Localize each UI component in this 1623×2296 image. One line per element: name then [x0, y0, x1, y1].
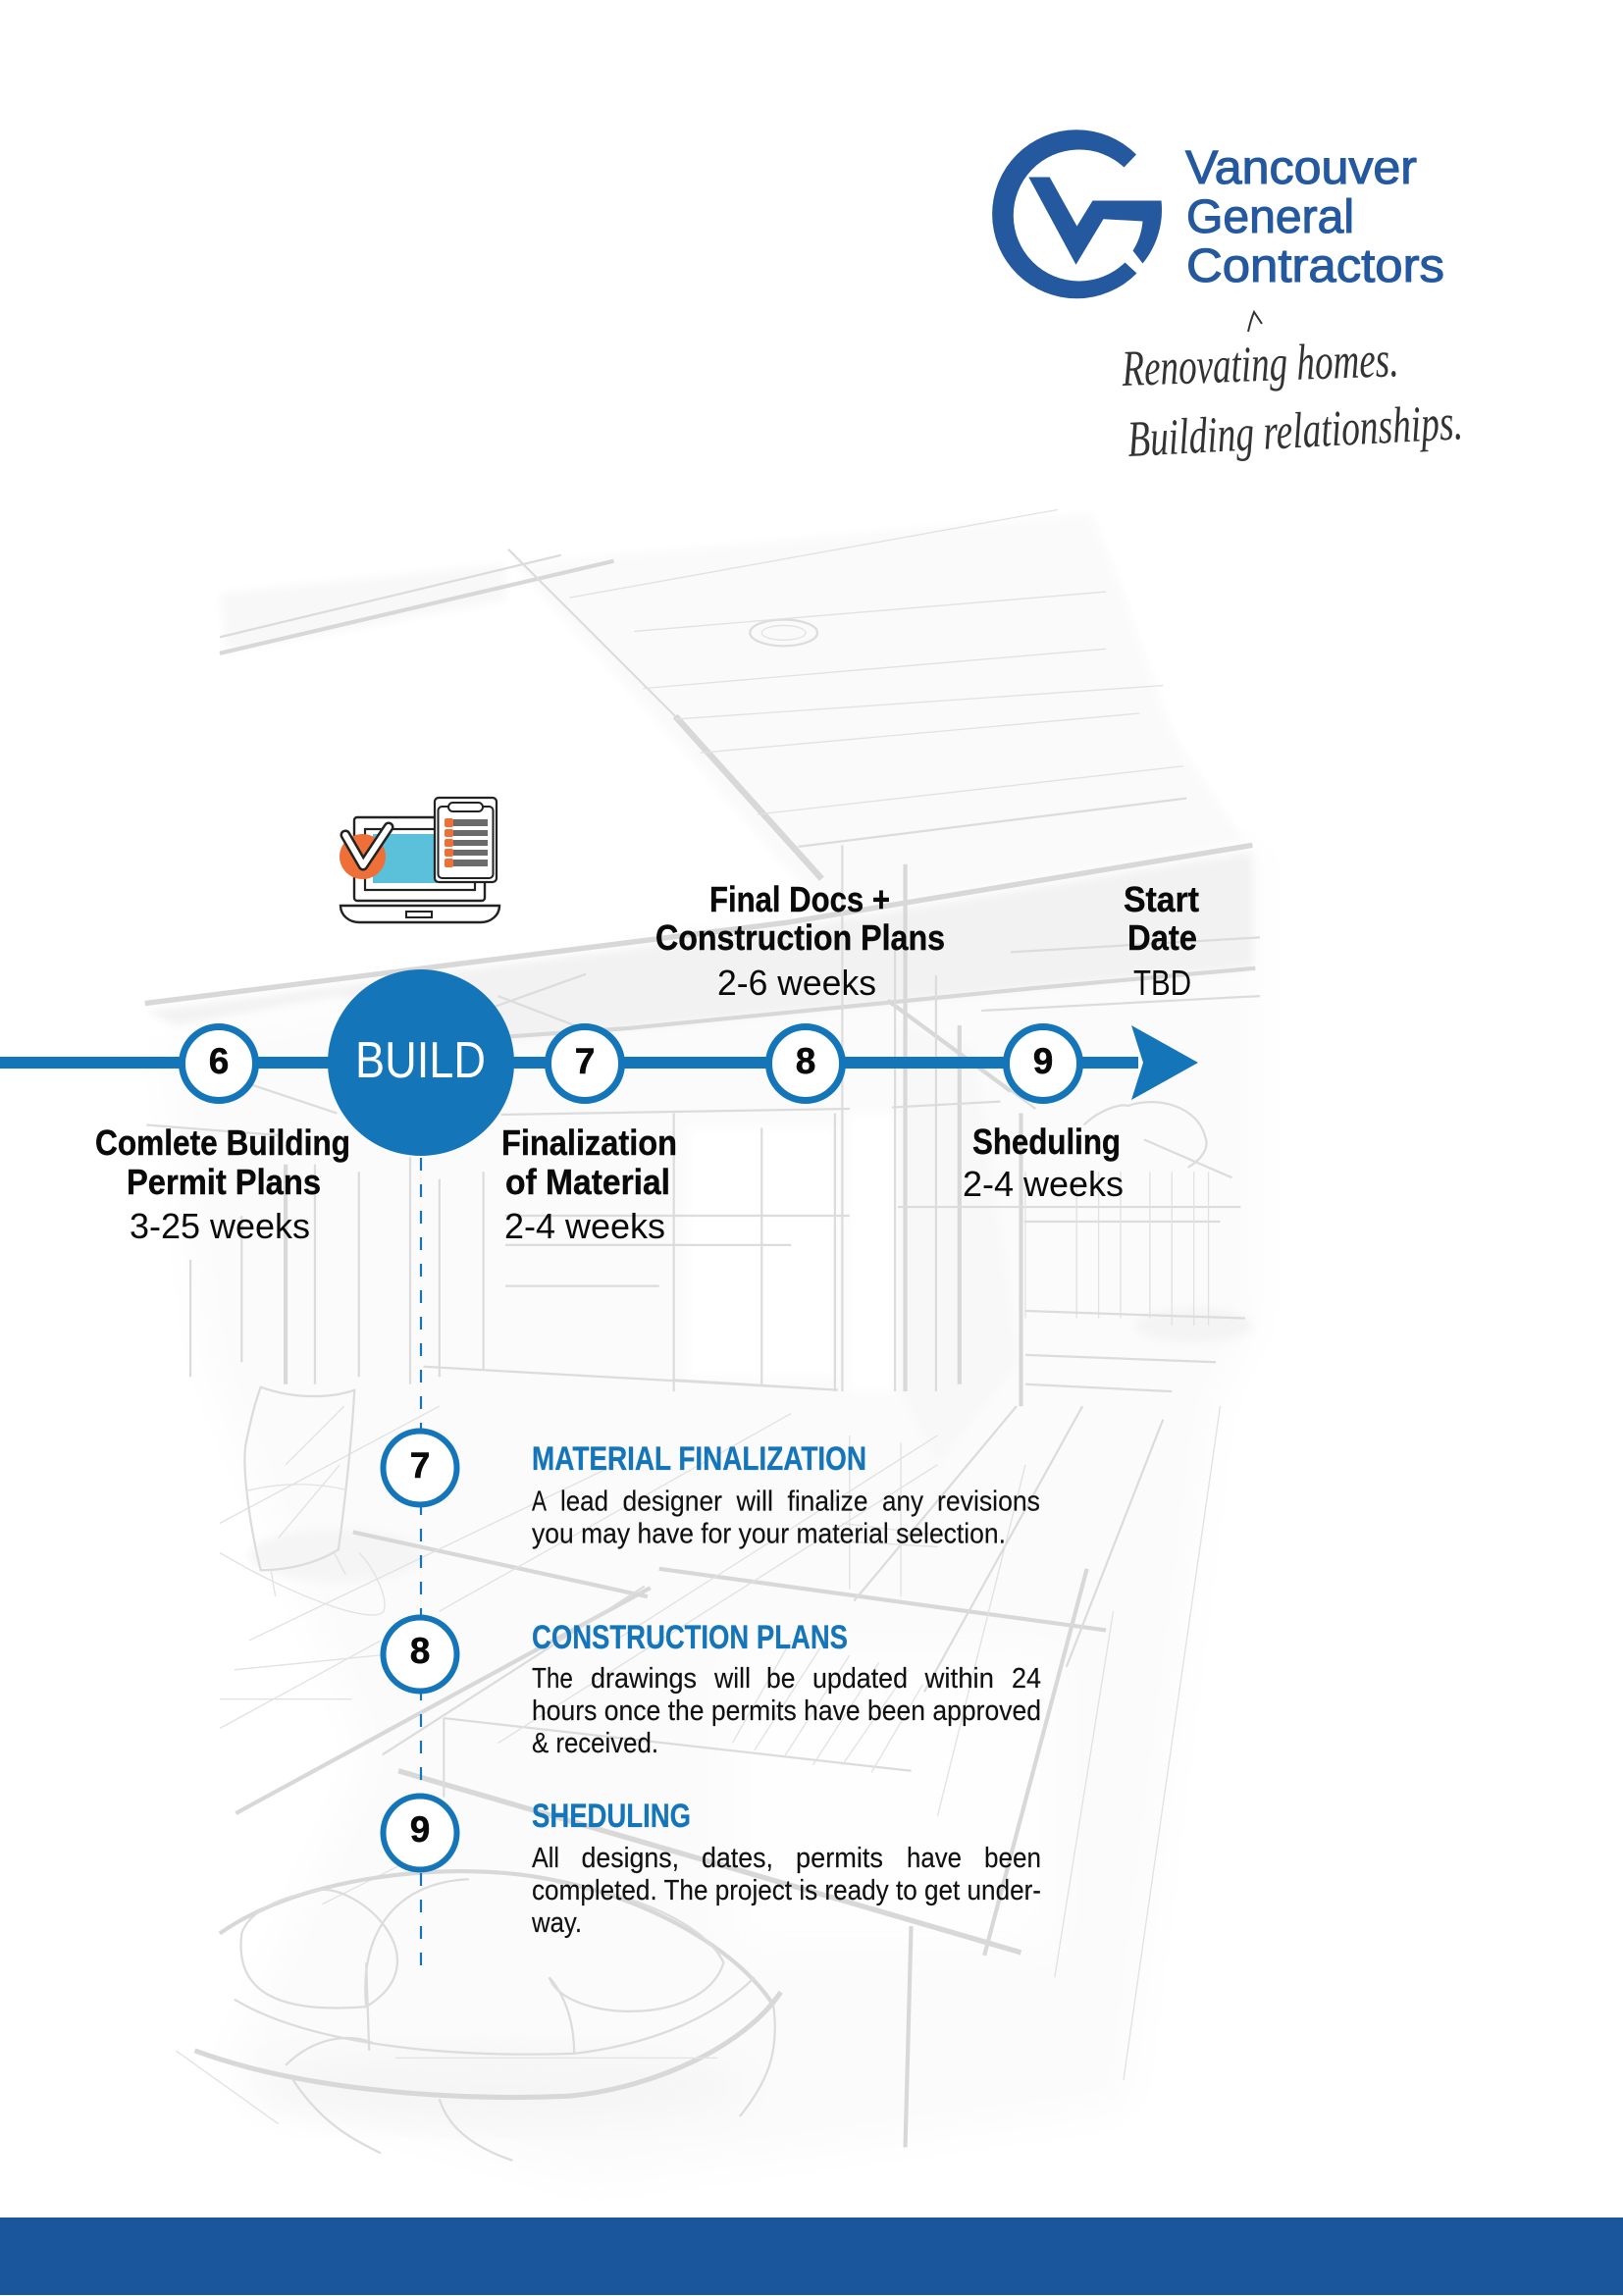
paragraph: revisions — [937, 1486, 1040, 1517]
paragraph: The — [532, 1663, 573, 1695]
insertion caret — [1248, 312, 1262, 332]
label: step 7: Finalization — [501, 1122, 677, 1163]
label: start date: Start — [1124, 879, 1199, 919]
label: step 9: Sheduling — [972, 1122, 1121, 1162]
step 6: 6 — [209, 1041, 229, 1081]
paragraph: 24 — [1012, 1663, 1041, 1695]
paragraph: & received. — [532, 1728, 658, 1759]
label: start date: Date — [1127, 917, 1197, 958]
logo wordmark: General — [1186, 191, 1354, 243]
label: step 8 — [655, 879, 945, 1003]
paragraph: any — [882, 1486, 923, 1517]
laptop screen — [354, 817, 485, 901]
heading: SHEDULING — [532, 1798, 691, 1835]
logo mark: ring — [992, 130, 1136, 298]
label: step 9 — [963, 1122, 1124, 1204]
laptop base — [340, 906, 499, 922]
label: step 6: 3-25 weeks — [130, 1206, 310, 1246]
label: step 7 — [501, 1122, 677, 1246]
label: step 7: of Material — [505, 1162, 670, 1202]
step 9 — [1007, 1026, 1079, 1101]
BUILD circle — [328, 969, 514, 1156]
paragraph: will — [736, 1486, 773, 1517]
detail: material finalization — [383, 1431, 1040, 1550]
label: step 7: 2-4 weeks — [504, 1206, 665, 1246]
step 8: 8 — [796, 1041, 815, 1081]
label: step 6 — [95, 1122, 350, 1246]
label: step 8: Construction Plans — [655, 917, 945, 958]
number badge 8 — [383, 1617, 457, 1692]
paragraph: designer — [622, 1486, 722, 1517]
number badge 9: 9 — [410, 1809, 430, 1850]
background sketch of interior — [145, 509, 1260, 2182]
paragraph: will — [713, 1663, 751, 1695]
paragraph: finalize — [787, 1486, 867, 1517]
label: step 6: Permit Plans — [127, 1162, 321, 1202]
paragraph: A — [532, 1486, 548, 1517]
icon: laptop with checklist — [340, 798, 499, 922]
paragraph: been — [984, 1843, 1041, 1874]
label: step 6: Comlete Building — [95, 1122, 350, 1163]
step 7 — [548, 1026, 622, 1101]
paragraph: you may have for your material selection. — [532, 1519, 1006, 1550]
label: step 8: Final Docs + — [709, 879, 890, 919]
timeline — [0, 969, 1198, 1974]
number badge 9 — [383, 1796, 457, 1870]
heading: MATERIAL FINALIZATION — [532, 1440, 866, 1478]
paragraph — [532, 1486, 1040, 1550]
tagline line 2: Building relationships. — [1126, 394, 1464, 468]
heading: CONSTRUCTION PLANS — [532, 1619, 848, 1656]
label: start date — [1124, 879, 1199, 1003]
logo wordmark: Vancouver — [1185, 142, 1417, 194]
detail: construction plans — [383, 1617, 1041, 1759]
tagline handwriting — [1121, 312, 1464, 468]
paragraph: designs, — [581, 1843, 679, 1874]
label: start date: TBD — [1133, 963, 1191, 1003]
paragraph: drawings — [591, 1663, 697, 1695]
paragraph: have — [907, 1843, 962, 1874]
label: step 8: 2-6 weeks — [717, 963, 876, 1003]
paragraph — [531, 1843, 1041, 1939]
paragraph: updated — [812, 1663, 908, 1695]
number badge 8: 8 — [410, 1631, 430, 1671]
step 9: 9 — [1033, 1041, 1053, 1081]
paragraph: way. — [531, 1907, 582, 1939]
paragraph: lead — [560, 1486, 608, 1517]
paragraph: All — [532, 1843, 559, 1874]
number badge 7: 7 — [410, 1445, 430, 1486]
step 7: 7 — [575, 1041, 595, 1081]
step 6 — [183, 1026, 255, 1101]
paragraph: permits — [796, 1843, 883, 1874]
BUILD circle: BUILD — [355, 1032, 486, 1089]
label: step 9: 2-4 weeks — [963, 1164, 1124, 1204]
paragraph: completed. The project is ready to get under- — [532, 1875, 1041, 1906]
dashed connector — [420, 1158, 422, 1974]
paragraph: hours once the permits have been approved — [532, 1696, 1041, 1727]
paragraph: be — [766, 1663, 795, 1695]
step 8 — [769, 1026, 842, 1101]
paragraph: within — [924, 1663, 994, 1695]
orange badge and check mark — [340, 827, 389, 879]
timeline line — [0, 1057, 1138, 1069]
tagline line 1: Renovating homes. — [1121, 332, 1399, 397]
logo wordmark — [1185, 142, 1444, 292]
logo: Vancouver General Contractors — [992, 130, 1444, 298]
logo mark: V and G bar — [1028, 177, 1162, 265]
clipboard — [435, 798, 497, 882]
paragraph — [532, 1663, 1041, 1759]
number badge 7 — [383, 1431, 457, 1505]
detail: sheduling — [383, 1796, 1041, 1939]
logo wordmark: Contractors — [1186, 240, 1444, 292]
arrow head — [1131, 1025, 1198, 1100]
paragraph: dates, — [702, 1843, 773, 1874]
footer band — [0, 2218, 1623, 2295]
